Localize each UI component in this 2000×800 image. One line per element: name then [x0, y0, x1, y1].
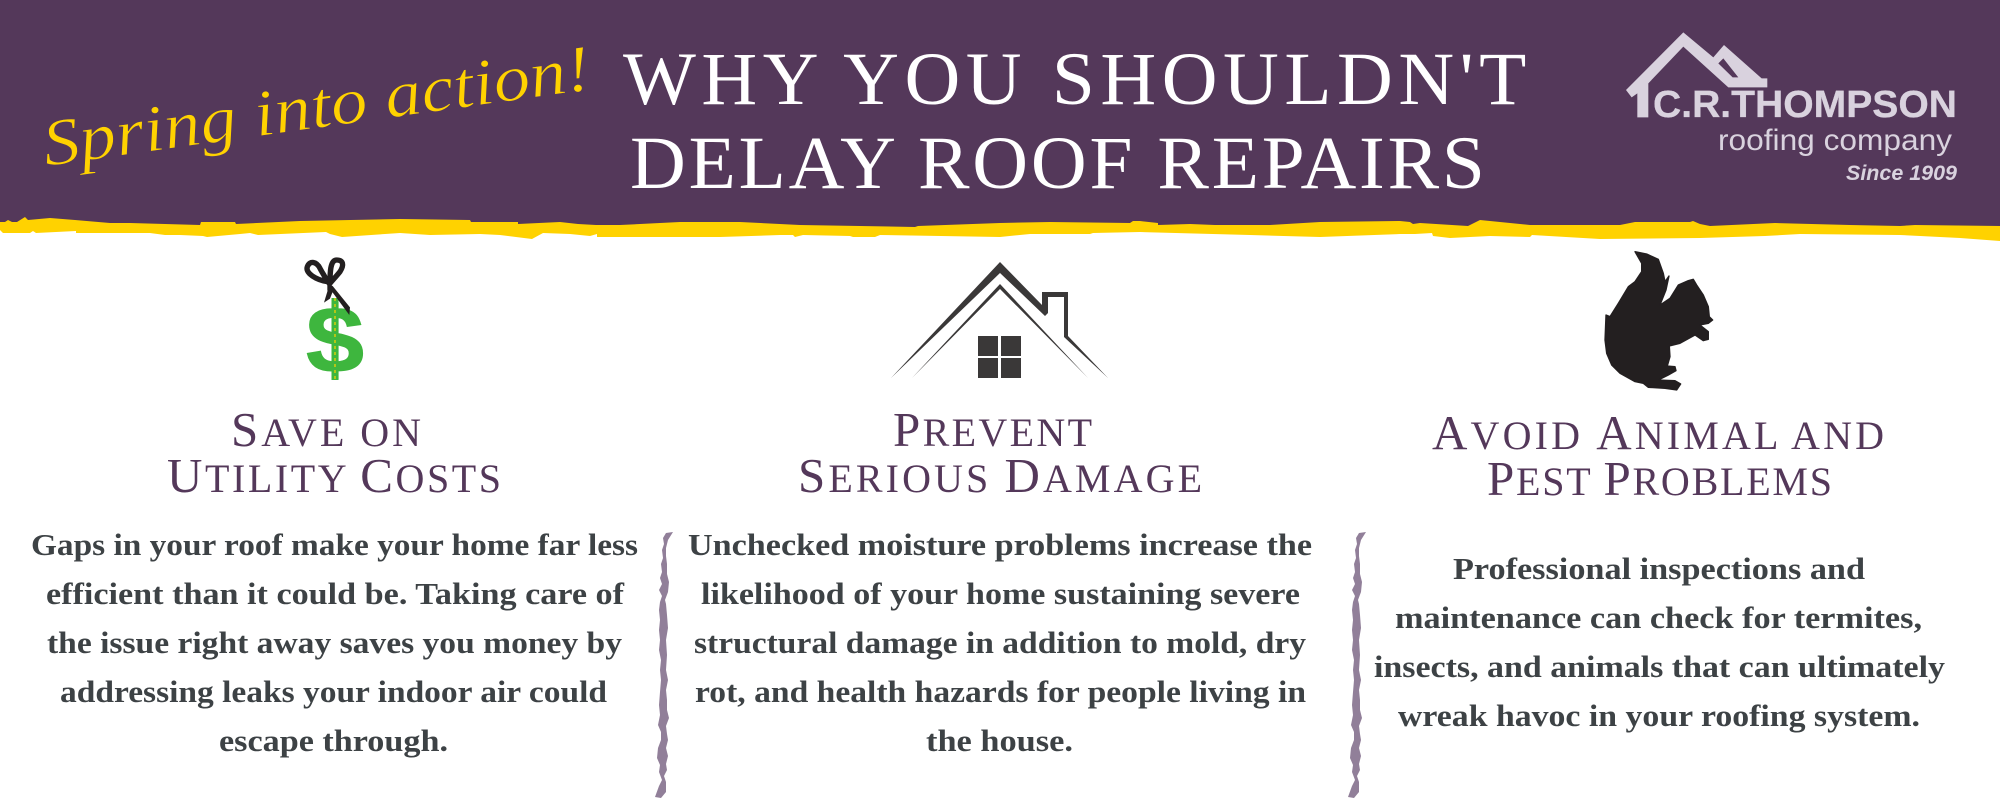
text block: utility costs: Gaps in your roof make your home far less	[31, 527, 638, 562]
text block: pests: wreak havoc in your roofing system.	[1398, 698, 1920, 733]
divider: left brush stroke	[655, 532, 673, 798]
text block: pests	[1374, 551, 1946, 733]
heading: prevent serious damage: SERIOUS DAMAGE	[798, 448, 1202, 503]
text block: serious damage	[688, 527, 1312, 758]
divider: right brush stroke	[1348, 532, 1366, 798]
text block: pests: insects, and animals that can ultimately	[1374, 649, 1946, 684]
heading: avoid animal and pest problems: PEST PROBLEMS	[1487, 451, 1832, 506]
text block: utility costs: addressing leaks your indoor air could	[60, 674, 607, 709]
icon: squirrel silhouette	[1605, 252, 1713, 390]
icon: logo roof	[1626, 32, 1767, 117]
icon: house roof	[891, 262, 1108, 378]
text block: serious damage: rot, and health hazards for people living in	[695, 674, 1306, 709]
panel: avoid animal and pest problems	[1374, 405, 1946, 733]
logo: C.R. Thompson roofing company: C.R.THOMPSON	[1653, 84, 1957, 126]
icon: scissors cutting dollar sign: $	[306, 287, 364, 392]
text block: utility costs: escape through.	[219, 723, 448, 758]
logo: C.R. Thompson roofing company: roofing company	[1718, 124, 1952, 157]
heading: avoid animal and pest problems	[1432, 405, 1884, 506]
text block: utility costs: efficient than it could be. Taking care of	[46, 576, 625, 611]
title	[623, 38, 1526, 205]
slogan: spring into action: Spring into action!	[38, 32, 595, 181]
logo: C.R. Thompson roofing company: Since 1909	[1846, 162, 1957, 185]
panel: save on utility costs	[31, 402, 638, 758]
heading: save on utility costs: UTILITY COSTS	[167, 448, 501, 503]
text block: serious damage: the house.	[926, 723, 1073, 758]
heading: save on utility costs	[167, 402, 501, 503]
text block: serious damage: Unchecked moisture problems increase the	[688, 527, 1312, 562]
heading: save on utility costs: SAVE ON	[231, 402, 421, 457]
text block: pests: Professional inspections and	[1453, 551, 1865, 586]
heading: prevent serious damage	[798, 402, 1202, 503]
text block: serious damage: structural damage in addition to mold, dry	[694, 625, 1307, 660]
panel: header banner	[0, 0, 2000, 241]
text block: serious damage: likelihood of your home sustaining severe	[701, 576, 1300, 611]
title: DELAY ROOF REPAIRS	[630, 122, 1485, 205]
text block: pests: maintenance can check for termites,	[1395, 600, 1922, 635]
panel: prevent serious damage	[688, 402, 1312, 758]
title: WHY YOU SHOULDN'T	[623, 38, 1526, 121]
heading: avoid animal and pest problems: AVOID ANIMAL AND	[1432, 405, 1884, 460]
heading: prevent serious damage: PREVENT	[893, 402, 1092, 457]
text block: utility costs: the issue right away saves you money by	[47, 625, 623, 660]
logo: C.R. Thompson roofing company	[1626, 32, 1957, 185]
text block: utility costs	[31, 527, 638, 758]
torn yellow stripe	[0, 217, 2000, 241]
